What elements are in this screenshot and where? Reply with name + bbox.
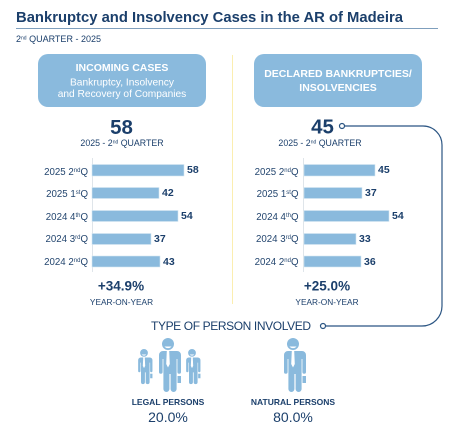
declared bankruptcies bar chart: 2025 2: [255, 167, 284, 178]
icon: group of three people: [138, 338, 200, 392]
legal persons label: LEGAL PERSONS: [132, 397, 205, 407]
panel: legal persons: [132, 338, 205, 425]
incoming cases bar chart: st: [76, 190, 81, 196]
incoming cases bar chart: 2025 1: [46, 189, 76, 200]
declared bankruptcies bar chart: 33: [359, 233, 371, 245]
incoming cases total: 2025 - 2: [80, 138, 113, 148]
declared bankruptcies bar chart: Q: [291, 257, 299, 268]
declared bankruptcies bar chart: 2025 1: [257, 189, 286, 200]
incoming cases bar chart: nd: [74, 168, 80, 174]
incoming cases bar chart: 54: [181, 210, 193, 222]
declared bankruptcies header box: [254, 54, 422, 107]
incoming cases total: 58: [110, 116, 133, 139]
declared bankruptcies bar chart: nd: [284, 258, 291, 264]
incoming cases total: nd: [113, 140, 118, 146]
panel: incoming cases: [38, 54, 206, 307]
incoming cases year-on-year: +34.9%: [98, 278, 144, 294]
heading: type of person involved: TYPE OF PERSON INVOLVED: [151, 319, 311, 333]
declared bankruptcies header box: DECLARED BANKRUPTCIES/: [264, 68, 412, 80]
declared bankruptcies bar chart: Q: [291, 234, 299, 245]
declared bankruptcies total: 2025 - 2: [278, 138, 311, 148]
incoming cases bar chart: th: [75, 213, 80, 219]
incoming cases year-on-year: YEAR-ON-YEAR: [90, 297, 153, 307]
declared bankruptcies total: QUARTER: [316, 138, 362, 148]
natural persons label: NATURAL PERSONS: [251, 397, 335, 407]
incoming cases bar chart: 37: [154, 233, 166, 245]
declared bankruptcies year-on-year: [295, 278, 359, 307]
declared bankruptcies bar chart: th: [286, 213, 291, 219]
incoming cases bar chart: 43: [163, 256, 175, 268]
incoming cases bar chart: 2025 2: [44, 167, 74, 178]
declared bankruptcies bar chart: 54: [392, 210, 404, 222]
connector arrow: [320, 124, 442, 328]
incoming cases header box: INCOMING CASES: [76, 62, 168, 74]
incoming cases bar chart: Q: [80, 189, 88, 200]
incoming cases header box: [38, 54, 206, 107]
incoming cases bar chart: [44, 158, 199, 272]
declared bankruptcies bar chart: nd: [284, 168, 291, 174]
declared bankruptcies bar chart: Q: [291, 167, 299, 178]
incoming cases bar chart: Q: [80, 167, 88, 178]
declared bankruptcies total: 45: [311, 116, 334, 138]
incoming cases bar chart: Q: [80, 234, 88, 245]
legal persons value: 20.0%: [148, 409, 188, 425]
subtitle: 2: [16, 34, 21, 44]
incoming cases bar chart: 2024 4: [46, 212, 75, 223]
declared bankruptcies header box: INSOLVENCIES: [299, 82, 377, 94]
incoming cases bar chart: 58: [187, 164, 199, 176]
incoming cases bar chart: Q: [80, 212, 88, 223]
panel: natural persons: [251, 338, 335, 425]
incoming cases total: [80, 116, 164, 148]
panel: declared bankruptcies: [254, 54, 422, 307]
incoming cases bar chart: rd: [75, 235, 80, 241]
incoming cases header box: Bankruptcy, Insolvency: [70, 78, 175, 88]
declared bankruptcies bar chart: 2024 4: [256, 212, 286, 223]
declared bankruptcies bar chart: Q: [291, 189, 299, 200]
title: Bankruptcy and Insolvency Cases in the AR of Madeira: [16, 10, 404, 26]
icon: person: [284, 338, 306, 392]
declared bankruptcies bar chart: 37: [365, 187, 377, 199]
declared bankruptcies bar chart: Q: [291, 212, 299, 223]
declared bankruptcies bar chart: 2024 3: [256, 234, 286, 245]
incoming cases year-on-year: [90, 278, 153, 307]
natural persons value: 80.0%: [273, 409, 313, 425]
declared bankruptcies total: [278, 116, 362, 148]
incoming cases header box: and Recovery of Companies: [58, 89, 186, 100]
declared bankruptcies bar chart: [255, 158, 404, 272]
incoming cases bar chart: 2024 3: [45, 234, 75, 245]
declared bankruptcies year-on-year: +25.0%: [304, 278, 350, 294]
incoming cases total: QUARTER: [118, 138, 164, 148]
incoming cases bar chart: Q: [80, 257, 88, 268]
incoming cases bar chart: nd: [74, 258, 80, 264]
declared bankruptcies bar chart: 45: [378, 164, 390, 176]
declared bankruptcies bar chart: 36: [364, 256, 376, 268]
incoming cases bar chart: 2024 2: [44, 257, 74, 268]
declared bankruptcies bar chart: 2024 2: [255, 257, 284, 268]
declared bankruptcies total: nd: [311, 140, 316, 146]
subtitle: nd: [21, 36, 27, 42]
declared bankruptcies bar chart: rd: [286, 235, 291, 241]
declared bankruptcies year-on-year: YEAR-ON-YEAR: [295, 297, 359, 307]
declared bankruptcies bar chart: st: [286, 190, 291, 196]
subtitle: QUARTER - 2025: [27, 34, 101, 44]
incoming cases bar chart: 42: [162, 187, 174, 199]
